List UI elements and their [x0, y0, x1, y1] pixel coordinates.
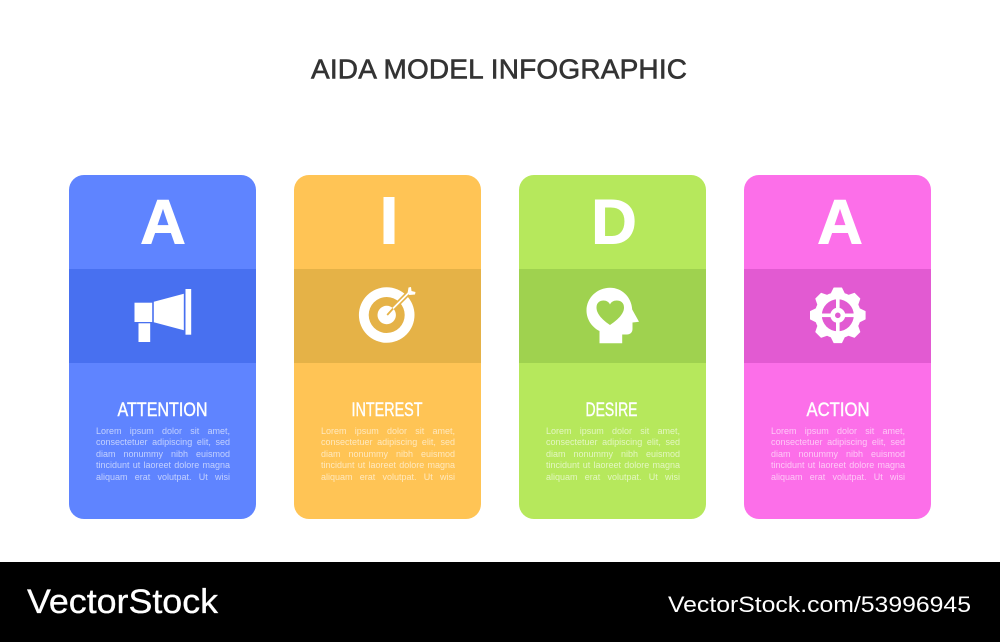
heading: attention: ATTENTION	[117, 400, 207, 421]
text block: Lorem ipsum dolor sit amet,	[321, 426, 455, 436]
letter A: A	[817, 188, 862, 258]
text block: consectetuer adipiscing elit, sed	[546, 437, 680, 447]
text block: tincidunt ut laoreet dolore magna	[96, 460, 230, 470]
text block: tincidunt ut laoreet dolore magna	[771, 460, 905, 470]
footer image id: VectorStock.com/53996945	[668, 592, 971, 617]
letter A: A	[140, 188, 185, 258]
panel: action	[744, 175, 931, 519]
letter I: I	[380, 188, 397, 258]
text block: Lorem ipsum dolor sit amet,	[546, 426, 680, 436]
text block: diam nonummy nibh euismod	[546, 449, 680, 459]
text block: diam nonummy nibh euismod	[771, 449, 905, 459]
icon: head with heart	[518, 269, 706, 363]
panel: interest	[294, 175, 481, 519]
heading: action: ACTION	[806, 400, 869, 421]
icon: megaphone	[68, 269, 256, 363]
icon: gear	[744, 269, 931, 363]
footer logo: VectorStock	[27, 583, 219, 621]
panel: desire	[518, 175, 706, 519]
text block: aliquam erat volutpat. Ut wisi	[771, 472, 905, 482]
footer bar	[0, 562, 1000, 642]
text block: consectetuer adipiscing elit, sed	[771, 437, 905, 447]
icon: target with arrow	[294, 269, 481, 363]
text block	[546, 426, 680, 482]
text block: diam nonummy nibh euismod	[321, 449, 455, 459]
title: AIDA MODEL INFOGRAPHIC	[311, 53, 687, 84]
text block	[321, 426, 455, 482]
heading: desire: DESIRE	[585, 400, 637, 421]
text block	[96, 426, 230, 482]
text block: tincidunt ut laoreet dolore magna	[321, 460, 455, 470]
text block: tincidunt ut laoreet dolore magna	[546, 460, 680, 470]
text block: diam nonummy nibh euismod	[96, 449, 230, 459]
text block: aliquam erat volutpat. Ut wisi	[96, 472, 230, 482]
text block: Lorem ipsum dolor sit amet,	[96, 426, 230, 436]
text block: aliquam erat volutpat. Ut wisi	[321, 472, 455, 482]
heading: interest: INTEREST	[351, 400, 422, 421]
letter D: D	[591, 188, 636, 258]
text block: consectetuer adipiscing elit, sed	[321, 437, 455, 447]
text block	[771, 426, 905, 482]
text block: Lorem ipsum dolor sit amet,	[771, 426, 905, 436]
text block: consectetuer adipiscing elit, sed	[96, 437, 230, 447]
panel: attention	[68, 175, 256, 519]
text block: aliquam erat volutpat. Ut wisi	[546, 472, 680, 482]
